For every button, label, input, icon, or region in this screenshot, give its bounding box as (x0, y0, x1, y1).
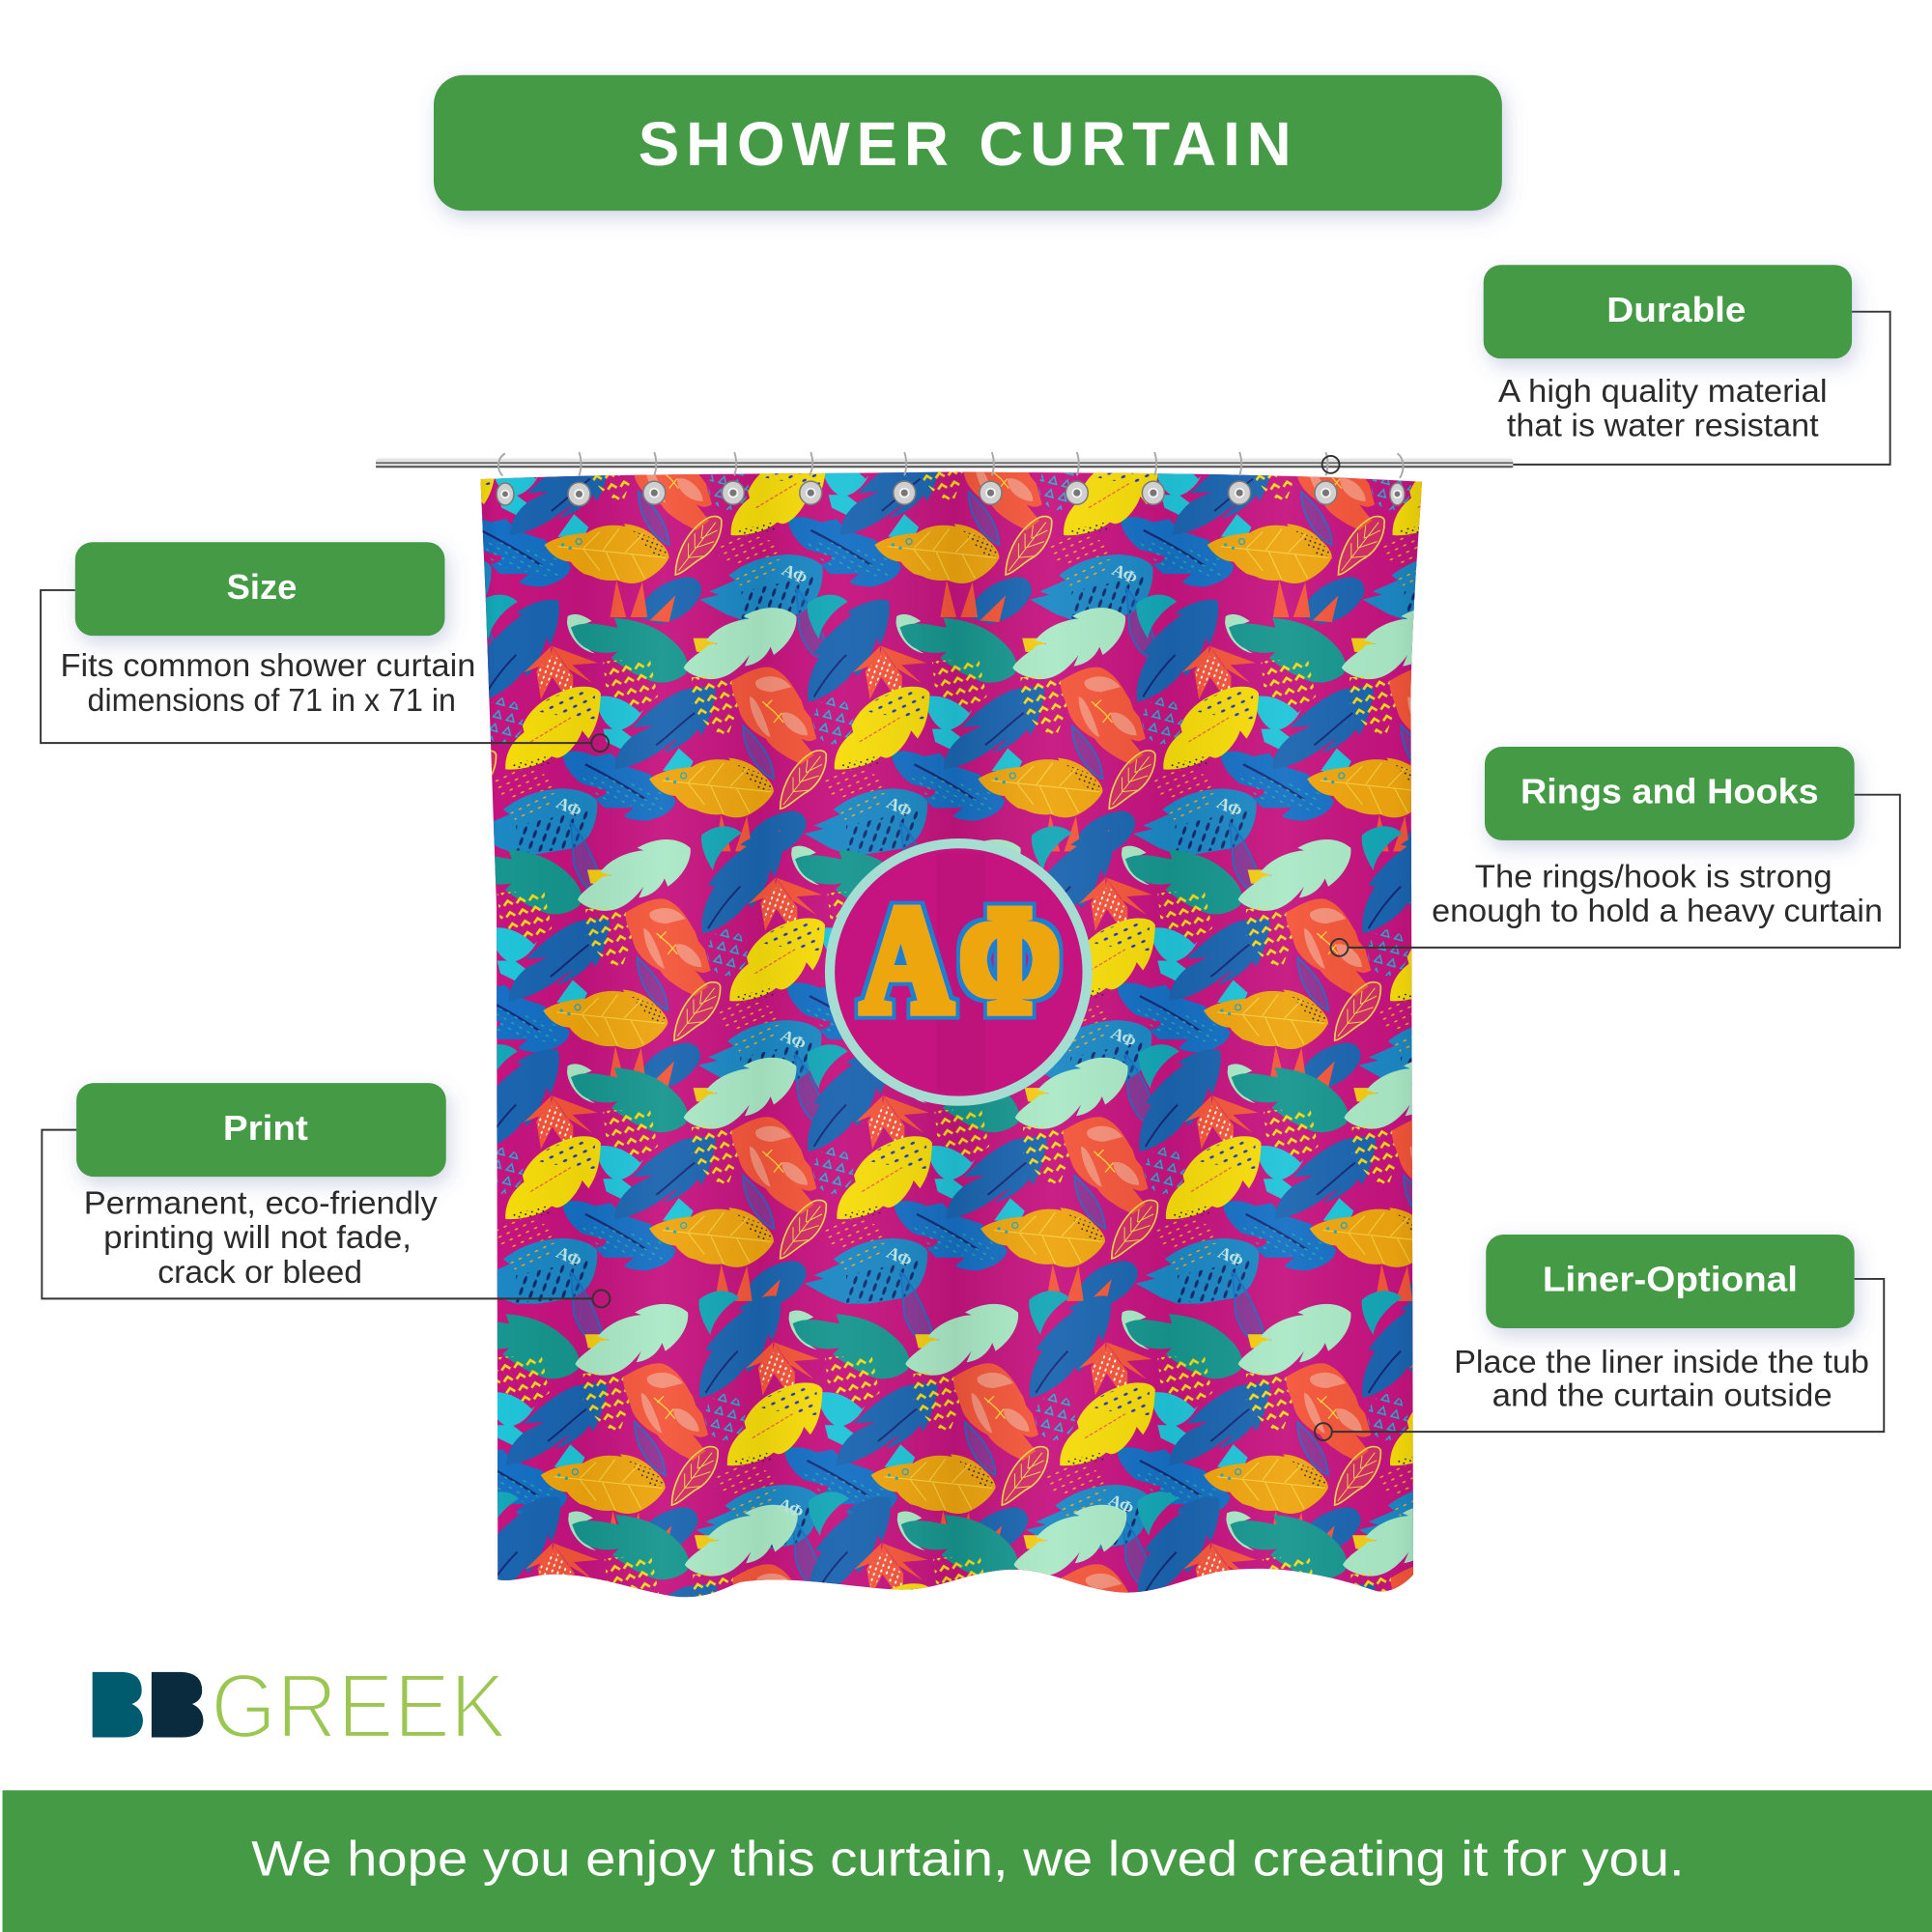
title banner (434, 75, 1502, 211)
panel: durable: that is water resistant (1507, 409, 1819, 444)
curtain fabric with tropical leaf pattern: ΑΦ (776, 1493, 807, 1522)
curtain fabric with tropical leaf pattern: ΑΦ (1106, 1490, 1137, 1519)
logo: BB Greek: GREEK (211, 1656, 506, 1757)
curtain fabric with tropical leaf pattern: ΑΦ (1215, 1242, 1247, 1270)
logo: BB Greek: B (156, 1662, 198, 1749)
footer band (3, 1790, 1932, 1932)
panel: liner optional: and the curtain outside (1492, 1378, 1833, 1413)
panel: size: Size (227, 568, 297, 607)
panel: durable: A high quality material (1498, 374, 1828, 410)
panel: durable: Durable (1606, 291, 1746, 329)
panel: rings and hooks (1432, 747, 1883, 929)
hooks and grommets (497, 452, 1405, 506)
title banner: SHOWER CURTAIN (639, 109, 1292, 179)
curtain fabric with tropical leaf pattern: ΑΦ (1109, 559, 1141, 588)
panel: rings and hooks: The rings/hook is strong (1475, 859, 1833, 895)
curtain fabric with tropical leaf pattern: ΑΦ (778, 1026, 810, 1054)
callout lines and markers (41, 312, 1900, 1440)
panel: rings and hooks: enough to hold a heavy curtain (1432, 894, 1883, 929)
panel: liner optional: Liner-Optional (1543, 1261, 1798, 1299)
panel: size (60, 542, 475, 719)
panel: liner optional: Place the liner inside the tub (1454, 1345, 1869, 1380)
curtain fabric with tropical leaf pattern: ΑΦ (780, 559, 810, 588)
panel: print: Permanent, eco-friendly (84, 1185, 438, 1221)
central monogram medallion (830, 843, 1088, 1101)
panel: print: Print (223, 1109, 308, 1148)
panel: print: crack or bleed (157, 1255, 362, 1291)
shower curtain product (376, 452, 1513, 1598)
central monogram medallion: Φ (960, 873, 1060, 1045)
curtain fabric with tropical leaf pattern: ΑΦ (884, 792, 915, 821)
curtain fabric with tropical leaf pattern: ΑΦ (1214, 792, 1245, 821)
panel: print: printing will not fade, (103, 1220, 412, 1256)
panel: durable (1484, 265, 1852, 444)
logo: BB Greek (93, 1656, 506, 1757)
panel: size: Fits common shower curtain (60, 648, 475, 684)
curtain fabric with tropical leaf pattern (481, 471, 1422, 1598)
logo: BB Greek: B (97, 1662, 137, 1749)
panel: rings and hooks: Rings and Hooks (1520, 773, 1819, 811)
curtain fabric with tropical leaf pattern: ΑΦ (884, 1242, 915, 1270)
panel: print (76, 1083, 446, 1291)
central monogram medallion: Α (862, 873, 952, 1045)
shower rod (376, 458, 1513, 469)
footer band: We hope you enjoy this curtain, we loved creating it for you. (251, 1831, 1685, 1886)
curtain fabric with tropical leaf pattern: ΑΦ (554, 792, 585, 821)
panel: liner optional (1454, 1235, 1869, 1413)
curtain fabric with tropical leaf pattern: ΑΦ (554, 1242, 585, 1270)
panel: size: dimensions of 71 in x 71 in (88, 683, 456, 719)
curtain fabric with tropical leaf pattern: ΑΦ (1108, 1023, 1140, 1051)
